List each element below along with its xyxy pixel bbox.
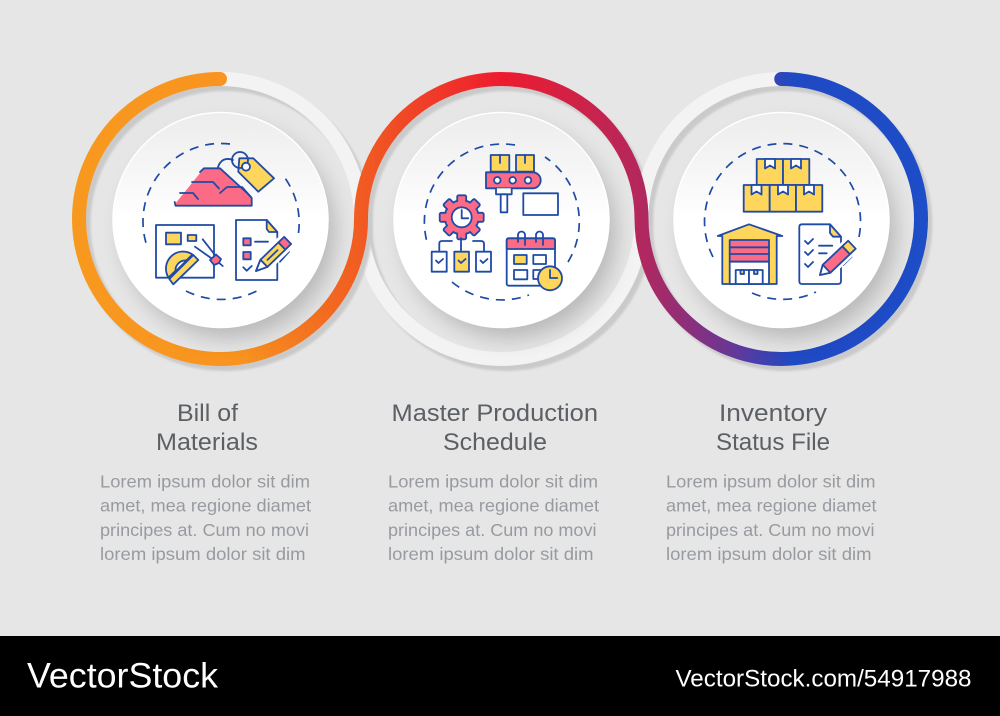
text block: bill of materials: Lorem ipsum dolor sit dim — [100, 472, 310, 492]
footer url: VectorStock.com/54917988 — [676, 666, 972, 693]
ring track: left ghost ring — [84, 79, 366, 364]
icon: checklist with pencil — [236, 220, 294, 280]
heading: master production schedule — [392, 400, 598, 456]
icon: conveyor belt with boxes — [486, 155, 558, 215]
panel: inventory status file disc and icon — [674, 112, 896, 338]
text block: master production schedule: principes at. Cum no movi — [388, 520, 596, 540]
icon: calendar with clock — [507, 232, 562, 290]
dashed circle — [705, 144, 861, 299]
icon: report with pencil — [799, 224, 858, 284]
text block: master production schedule: lorem ipsum dolor sit dim — [388, 544, 594, 564]
text block: master production schedule: Lorem ipsum dolor sit dim — [388, 472, 598, 492]
icon: stacked boxes — [744, 159, 822, 212]
text block: bill of materials: lorem ipsum dolor sit dim — [100, 544, 306, 564]
icon: gear with clock and org chart — [432, 195, 491, 272]
dashed circle — [143, 143, 299, 299]
heading: master production schedule: Schedule — [443, 429, 547, 456]
footer logo: VectorStock — [27, 656, 219, 696]
icon: warehouse — [718, 224, 782, 284]
text block: master production schedule — [388, 472, 599, 564]
heading: inventory status file: Status File — [716, 429, 830, 456]
gradient spiral line — [79, 79, 921, 359]
heading: inventory status file: Inventory — [719, 400, 827, 427]
dashed circle — [424, 144, 579, 300]
ring track: middle ghost ring — [361, 84, 646, 364]
text block: inventory status file: principes at. Cum no movi — [666, 520, 874, 540]
footer bar — [0, 636, 1000, 716]
icon: blueprint with protractor and compass — [156, 225, 223, 284]
panel: master production schedule disc and icon — [394, 112, 616, 338]
text block: inventory status file: lorem ipsum dolor sit dim — [666, 544, 872, 564]
text block: inventory status file: amet, mea regione diamet — [666, 496, 877, 516]
text block: inventory status file: Lorem ipsum dolor sit dim — [666, 472, 876, 492]
text block: bill of materials: amet, mea regione diamet — [100, 496, 311, 516]
text block: inventory status file — [666, 472, 877, 564]
text block: bill of materials — [100, 472, 311, 564]
heading: inventory status file — [716, 400, 830, 456]
text block: master production schedule: amet, mea regione diamet — [388, 496, 599, 516]
panel: bill of materials disc and icon — [113, 112, 335, 338]
heading: bill of materials: Materials — [156, 429, 258, 456]
heading: bill of materials: Bill of — [177, 400, 238, 427]
heading: bill of materials — [156, 400, 258, 456]
ring track: right ghost ring — [642, 79, 925, 364]
icon: material pile with price tag — [175, 152, 274, 206]
heading: master production schedule: Master Production — [392, 400, 598, 427]
text block: bill of materials: principes at. Cum no movi — [100, 520, 309, 540]
